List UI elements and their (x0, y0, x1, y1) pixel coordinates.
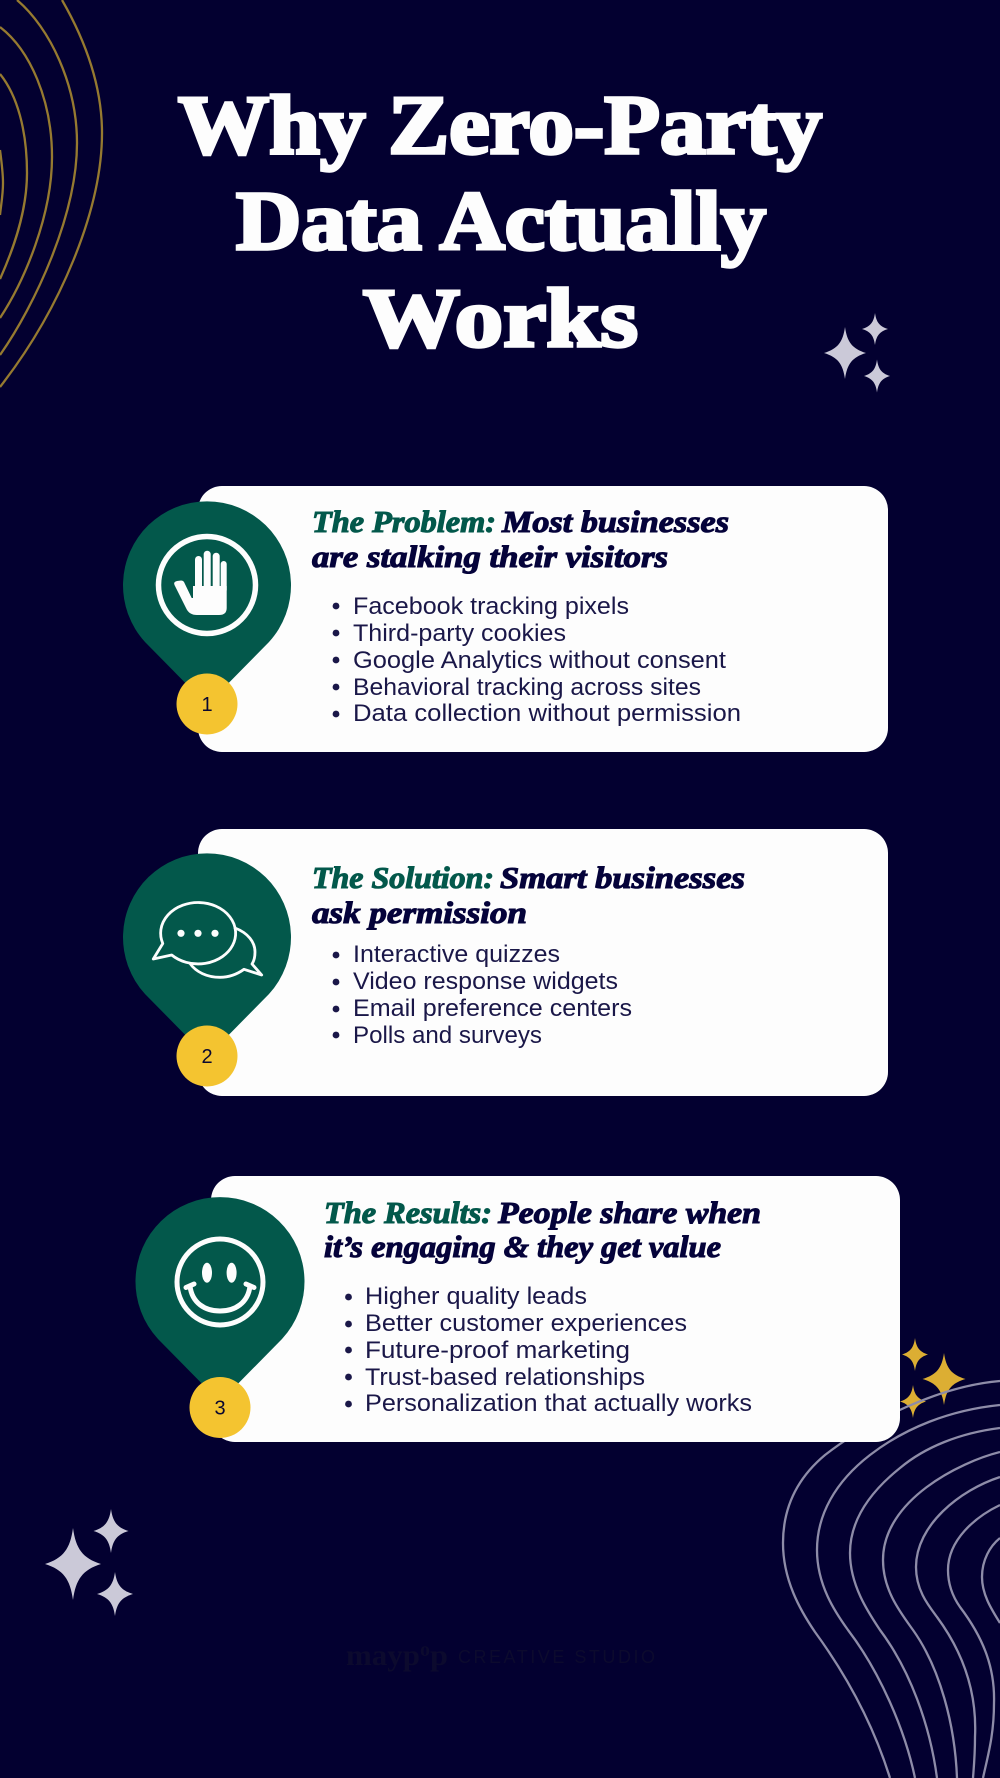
card background (198, 486, 888, 752)
footer watermark: mayp (346, 1639, 420, 1672)
bullet list: Interactive quizzes (353, 941, 560, 968)
title: Works (363, 272, 638, 365)
bullet list: Third-party cookies (353, 620, 566, 647)
panel: the solution (123, 829, 888, 1096)
bullet list: Trust-based relationships (365, 1364, 645, 1391)
number badge 1: 1 (201, 694, 213, 716)
number badge 1 (176, 674, 238, 734)
icon: smiley face (177, 1239, 263, 1325)
bullet list (333, 593, 741, 727)
card background (198, 829, 888, 1096)
heading (312, 504, 729, 574)
card background (211, 1176, 900, 1442)
map pin (123, 853, 291, 1057)
heading: it’s engaging & they get value (324, 1229, 721, 1264)
decorative gold contour lines (0, 0, 102, 387)
icon: silver sparkles bottom left (45, 1509, 133, 1616)
bullet list: Behavioral tracking across sites (353, 674, 701, 701)
bullet list (333, 941, 632, 1049)
bullet list: Data collection without permission (353, 700, 741, 727)
heading: The Problem: (312, 504, 496, 539)
bullet list: Polls and surveys (353, 1022, 542, 1049)
footer watermark: o (420, 1639, 430, 1661)
heading: People share when (497, 1195, 761, 1230)
map pin (123, 501, 291, 705)
footer watermark (346, 1639, 655, 1672)
heading (312, 860, 745, 930)
bullet list: Google Analytics without consent (353, 647, 726, 674)
bullet list: Higher quality leads (365, 1283, 587, 1310)
bullet list: Future-proof marketing (365, 1337, 630, 1364)
heading: The Results: (324, 1195, 492, 1230)
decorative silver contour lines (783, 1381, 1000, 1778)
heading: ask permission (312, 895, 527, 930)
footer watermark: CREATIVE STUDIO (458, 1647, 655, 1667)
number badge 3 (190, 1377, 250, 1438)
icon: gold sparkles right (900, 1338, 966, 1418)
icon: silver sparkles top right (824, 313, 890, 392)
number badge 2: 2 (201, 1046, 213, 1068)
title: Why Zero-Party (178, 79, 822, 172)
heading (324, 1195, 761, 1264)
bullet list: Personalization that actually works (365, 1390, 752, 1417)
map pin (136, 1197, 304, 1402)
bullet list (345, 1283, 752, 1417)
title: Data Actually (236, 175, 766, 268)
bullet list: Email preference centers (353, 995, 632, 1022)
title (178, 79, 822, 365)
bullet list: Video response widgets (353, 968, 618, 995)
panel: the problem (123, 486, 888, 752)
icon: chat bubbles (153, 903, 262, 977)
heading: Most businesses (501, 504, 729, 539)
footer watermark: p (430, 1639, 448, 1672)
heading: are stalking their visitors (312, 539, 668, 574)
heading: Smart businesses (500, 860, 745, 895)
number badge 2 (176, 1026, 238, 1086)
heading: The Solution: (312, 860, 494, 895)
bullet list: Better customer experiences (365, 1310, 687, 1337)
number badge 3: 3 (214, 1398, 226, 1420)
bullet list: Facebook tracking pixels (353, 593, 629, 620)
icon: stop hand (158, 536, 256, 634)
panel: the results (136, 1176, 900, 1442)
